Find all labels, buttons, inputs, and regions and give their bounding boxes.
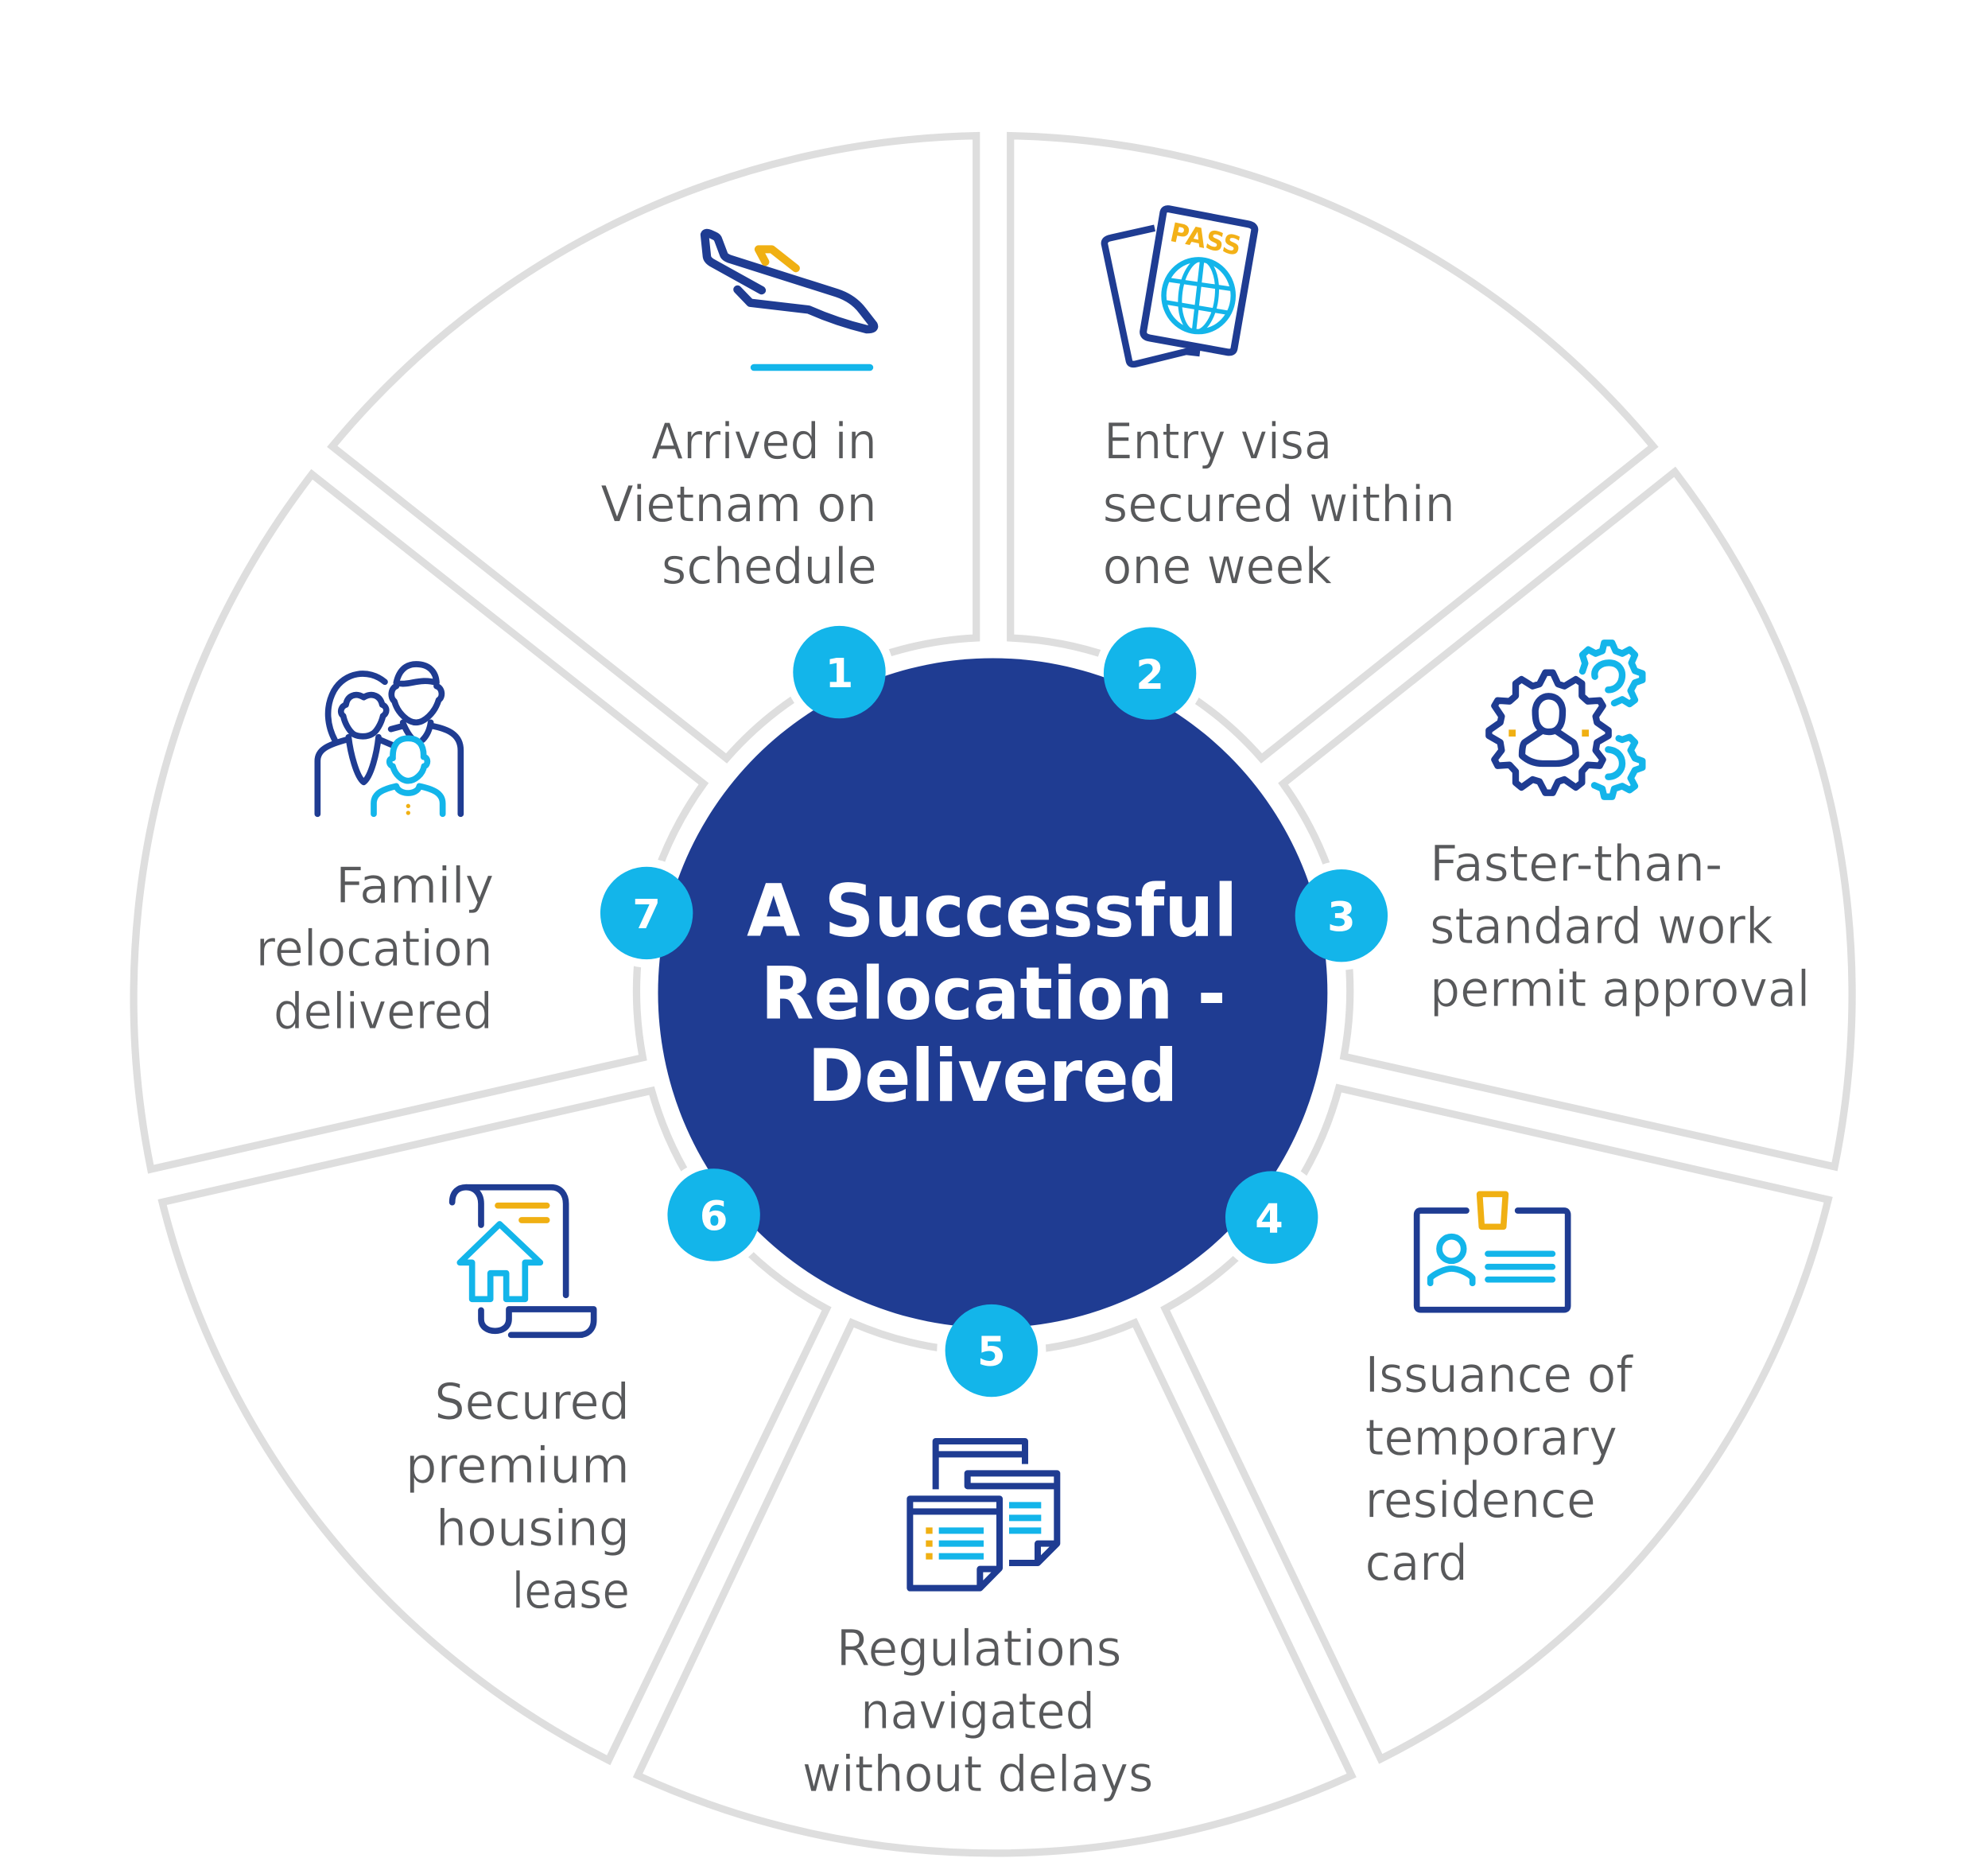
badge 3: 3 [1327, 894, 1356, 941]
text: family [256, 857, 494, 1040]
text: residence card [1365, 1346, 1634, 1592]
badge 6: 6 [700, 1194, 728, 1241]
text: regulations: navigated [860, 1682, 1095, 1740]
icon: plane landing [705, 233, 874, 367]
icon: documents [910, 1441, 1057, 1588]
central circle [658, 659, 1327, 1328]
panel: segment 7 family [134, 474, 704, 1169]
text: entry visa: Entry visa [1104, 412, 1332, 470]
text: entry visa: one week [1103, 537, 1332, 595]
panel: segment 3 work permit [1283, 472, 1852, 1167]
text: entry visa: secured within [1103, 475, 1455, 533]
text: family: delivered [274, 982, 493, 1040]
title [747, 870, 1237, 1118]
text: housing [406, 1373, 630, 1620]
text: residence card: residence [1365, 1471, 1596, 1530]
badge 5: 5 [977, 1329, 1006, 1376]
text: regulations: without delays [802, 1745, 1153, 1803]
badge 7: 7 [632, 892, 661, 939]
badge clearance rings [592, 617, 1396, 1405]
text: arrived in Vietnam: Vietnam on [600, 475, 877, 533]
text: entry visa [1103, 412, 1455, 595]
text: family: relocation [256, 919, 493, 978]
badge 1: 1 [825, 651, 853, 698]
icon: house lease scroll [452, 1188, 594, 1335]
text: arrived in Vietnam [600, 412, 877, 595]
icon: passport: PASS [1167, 216, 1244, 262]
text: work permit [1430, 834, 1810, 1018]
badge 3 [1295, 869, 1388, 962]
badge 2: 2 [1136, 652, 1164, 699]
text: regulations: Regulations [837, 1619, 1122, 1677]
text: arrived in Vietnam: schedule [662, 537, 877, 595]
icon: id card [1417, 1194, 1568, 1310]
panel: segment 4 residence card [1165, 1088, 1828, 1759]
badge 1 [793, 626, 886, 718]
text: work permit: Faster-than- [1430, 834, 1722, 892]
text: residence card: Issuance of [1365, 1346, 1634, 1404]
text: work permit: permit approval [1430, 960, 1810, 1018]
badge 4 [1225, 1171, 1318, 1264]
text: work permit: standard work [1430, 897, 1773, 955]
title: A Successful [747, 870, 1237, 954]
text: residence card: card [1365, 1534, 1468, 1592]
panel: segment 5 regulations [638, 1323, 1352, 1853]
text: housing: housing [436, 1499, 630, 1557]
icon: gears and person [1489, 643, 1642, 797]
text: family: Family [336, 857, 494, 915]
panel: segment 2 visa [1011, 136, 1653, 758]
text: housing: lease [512, 1562, 630, 1620]
text: housing: Secured [434, 1373, 630, 1431]
title: Delivered [808, 1035, 1178, 1118]
badge 6 [667, 1168, 760, 1261]
icon: family [317, 664, 460, 815]
text: residence card: temporary [1365, 1409, 1617, 1467]
badge 4: 4 [1255, 1196, 1283, 1243]
badge 7 [600, 867, 693, 959]
text: housing: premium [406, 1436, 630, 1495]
badge 5 [945, 1304, 1038, 1397]
title: Relocation - [761, 952, 1226, 1036]
icon: passport [1105, 209, 1255, 364]
panel: segment 6 housing [162, 1090, 827, 1760]
text: arrived in Vietnam: Arrived in [651, 412, 877, 470]
text: regulations [802, 1619, 1153, 1803]
badge 2 [1104, 627, 1196, 720]
panel: segment 1 arrived [332, 136, 977, 758]
